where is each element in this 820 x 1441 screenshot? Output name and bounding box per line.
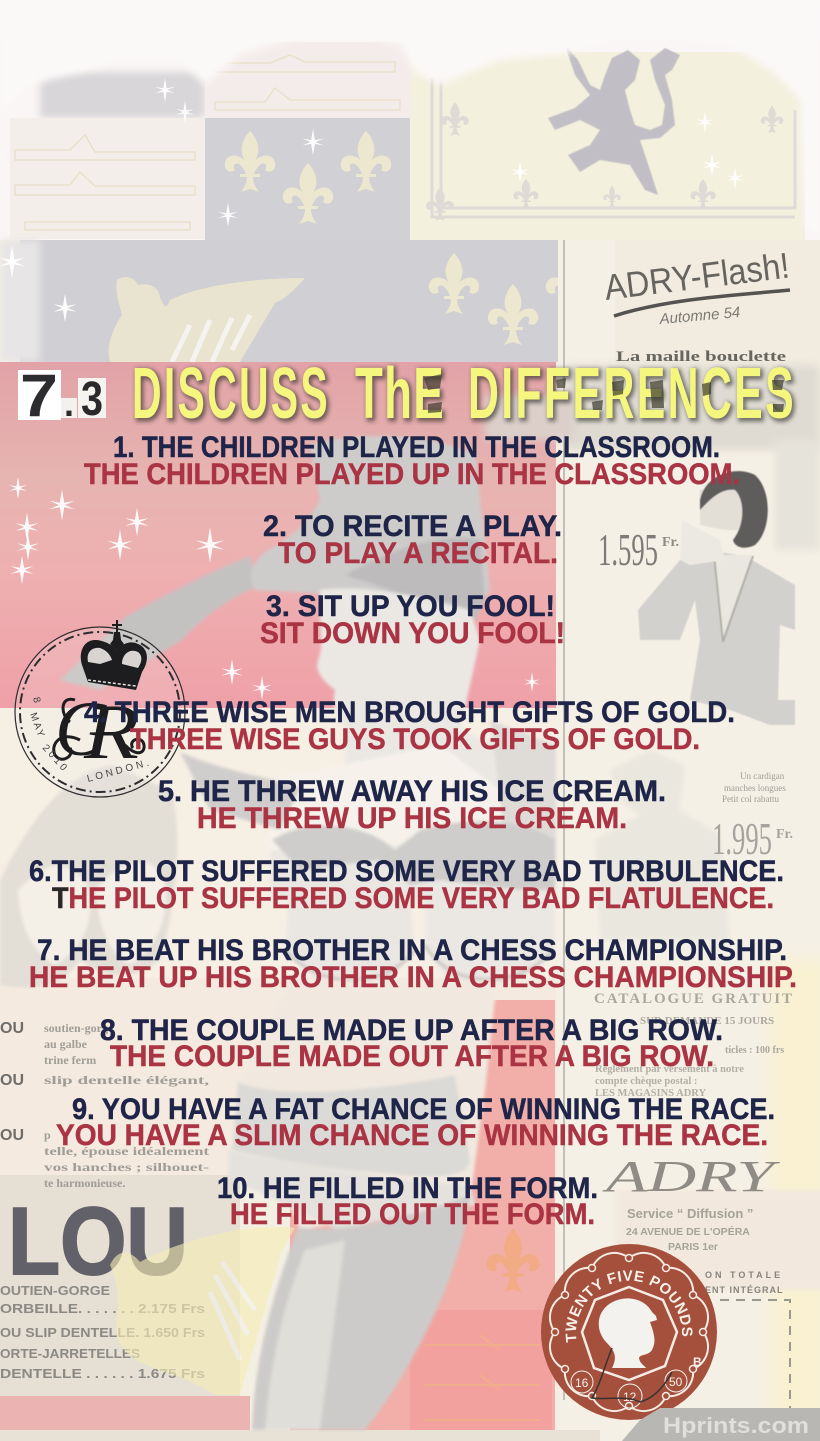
stamp: royal cypher postmark <box>15 620 185 797</box>
text: LOU ad <box>0 1188 205 1381</box>
text: la maille bouclette: La maille bouclette <box>616 349 786 365</box>
text: postmark date: 8 <box>30 696 42 705</box>
icon: orange fleur <box>487 1228 539 1292</box>
text: left column ad: vos hanches ; silhouet- <box>44 1160 209 1174</box>
text: catalogue gratuit: CATALOGUE GRATUIT <box>594 991 792 1007</box>
text: LOU ad: OUTIEN-GORGE <box>0 1283 110 1298</box>
item 5 <box>158 775 666 835</box>
text: left column ad: slip dentelle élégant, <box>44 1073 209 1087</box>
text: stamp values: 12 <box>623 1390 637 1404</box>
text: postmark date: LONDON. <box>86 757 153 785</box>
watermark: Hprints.com <box>663 1413 809 1438</box>
item 1 <box>84 431 740 491</box>
item 10 <box>217 1172 598 1231</box>
text: left column ad: au galbe <box>44 1037 88 1051</box>
starry sparkles <box>0 78 744 700</box>
item 2 <box>263 510 562 570</box>
text: postmark date <box>27 696 153 785</box>
icon: heraldic lion <box>548 45 680 195</box>
photo: pin-up woman <box>0 436 556 1430</box>
text: left column ad: te harmonieuse. <box>44 1176 125 1190</box>
bra cups <box>272 821 555 890</box>
text: stamp legend: TWENTY FIVE POUNDS <box>565 1270 692 1343</box>
torso <box>238 980 497 1230</box>
text: LOU ad: ORBEILLE. . . . . . . 2.175 Frs <box>0 1301 205 1316</box>
text: left column ad <box>0 1020 209 1190</box>
text: stamp values: 50 <box>669 1375 683 1389</box>
title shadow: ThE <box>357 356 447 436</box>
scalloped ring <box>550 1253 708 1411</box>
lions passant faint <box>15 55 400 230</box>
text: order details: SUR DEMANDE 15 JOURS <box>640 1015 774 1027</box>
text: cardigan caption <box>722 771 786 804</box>
text: left column ad: p <box>44 1128 51 1142</box>
item 7 <box>29 934 797 994</box>
badge: 7.3: 7 <box>20 362 58 429</box>
title shadow: DISCUSS <box>134 356 332 436</box>
newsprint right column <box>558 240 820 1441</box>
panel: heraldic flag top <box>0 40 820 362</box>
title <box>18 354 798 436</box>
chest <box>270 745 510 850</box>
list: differences <box>29 431 797 1231</box>
item 4: THREE WISE GUYS TOOK GIFTS OF GOLD. <box>130 723 700 756</box>
lace briefs <box>232 1075 470 1177</box>
text: cardigan caption: Un cardigan <box>740 771 785 781</box>
item 8 <box>100 1014 723 1073</box>
text: ADRY service block <box>601 1152 790 1410</box>
monogram flourishes <box>54 699 144 759</box>
title grunge marks <box>424 374 784 413</box>
icon: yellow harp angel faint <box>110 1227 295 1395</box>
text: left column ad: OU <box>0 1072 24 1089</box>
item 10: HE FILLED OUT THE FORM. <box>230 1198 595 1231</box>
photo: cardigan woman faint <box>595 750 730 940</box>
item 4: 4. THREE WISE MEN BROUGHT GIFTS OF GOLD. <box>84 696 735 729</box>
icon: crown <box>81 620 147 690</box>
item 8: THE COUPLE MADE OUT AFTER A BIG ROW. <box>110 1040 714 1073</box>
text: stamp values <box>571 1370 687 1408</box>
item 10: 10. HE FILLED IN THE FORM. <box>217 1172 598 1205</box>
text: LOU ad: OU SLIP DENTELLE. 1.650 Frs <box>0 1325 205 1340</box>
text: order details: Règlement par versement à notre <box>595 1064 744 1075</box>
icon: profile head <box>599 1298 657 1368</box>
text: LOU ad: DENTELLE . . . . . . 1.675 Frs <box>0 1366 205 1381</box>
text: left column ad: trine ferm <box>44 1053 96 1067</box>
item 5: 5. HE THREW AWAY HIS ICE CREAM. <box>158 775 666 808</box>
text: order details: compte chèque postal : <box>595 1076 697 1087</box>
text: stamp mark B: B <box>693 1355 702 1369</box>
item 7: 7. HE BEAT HIS BROTHER IN A CHESS CHAMPIONSHIP. <box>37 934 787 967</box>
text: ADRY service block: Service “ Diffusion ” <box>627 1206 753 1221</box>
item 3 <box>260 590 565 650</box>
text: ADRY-Flash header <box>602 245 792 328</box>
text: stamp values: 16 <box>575 1376 589 1390</box>
photo: woman in v-neck illustration <box>638 471 795 725</box>
lions pink block <box>425 1335 540 1420</box>
item 9 <box>56 1093 775 1152</box>
item 6 <box>29 855 784 915</box>
item 2: TO PLAY A RECITAL. <box>278 537 558 570</box>
text: postmark date: 2010 <box>40 743 71 775</box>
heading text <box>132 354 798 436</box>
scallop dots <box>552 1254 706 1410</box>
newspaper clippings <box>0 245 795 1420</box>
title letters <box>132 354 796 434</box>
face and neck <box>270 588 556 900</box>
text: left column ad: OU <box>0 1127 24 1144</box>
text: GR monogram: V <box>92 710 102 725</box>
text: postmark date: MAY <box>27 711 47 740</box>
watermark <box>622 1408 820 1441</box>
text: order details: ticles : 100 frs <box>725 1045 784 1056</box>
hair and sleeve <box>251 436 490 620</box>
item 9: YOU HAVE A SLIM CHANCE OF WINNING THE RACE. <box>56 1119 768 1152</box>
text: cardigan caption: manches longues <box>724 783 786 793</box>
item 1: 1. THE CHILDREN PLAYED IN THE CLASSROOM. <box>113 431 720 464</box>
text: GR monogram <box>55 685 139 775</box>
item 4 <box>84 696 735 756</box>
title letters: ThE <box>355 354 445 434</box>
title shadow <box>134 356 798 436</box>
item 3: 3. SIT UP YOU FOOL! <box>266 590 555 623</box>
panel: pink band <box>0 362 600 1441</box>
badge: 7.3: 3 <box>81 373 103 426</box>
text: left column ad: soutien-gorge <box>44 1021 114 1035</box>
forearm <box>60 556 258 690</box>
item 2: 2. TO RECITE A PLAY. <box>263 510 562 543</box>
badge: 7.3: . <box>64 383 74 424</box>
thigh <box>252 1195 470 1430</box>
text: ADRY-Flash header: Automne 54 <box>658 304 741 328</box>
small border fleurs <box>426 102 783 221</box>
icon: harp angel <box>109 277 305 362</box>
text: ADRY service block: ON TOTALE <box>705 1270 783 1280</box>
text: LOU ad: LOU <box>8 1188 188 1295</box>
text: price 1.595: 1.595 <box>598 524 658 575</box>
badge: 7.3 <box>18 362 106 429</box>
text: Fr: Fr. <box>662 535 679 550</box>
text: GR monogram: R <box>83 688 139 775</box>
text: GR monogram: G <box>55 685 110 772</box>
text: ADRY-Flash header: ADRY-Flash! <box>602 245 792 308</box>
fleur-de-lis group <box>225 131 596 345</box>
item 3: SIT DOWN YOU FOOL! <box>260 617 565 650</box>
text: cardigan caption: Petit col rabattu <box>722 794 779 804</box>
text: ADRY service block: ENT INTÉGRAL <box>705 1285 784 1295</box>
text: Fr small: Fr. <box>776 827 793 842</box>
text: order details <box>595 1015 784 1099</box>
shoulder shadow <box>180 752 300 830</box>
item 1: THE CHILDREN PLAYED UP IN THE CLASSROOM. <box>84 458 740 491</box>
text: LOU ad: ORTE-JARRETELLES <box>0 1346 140 1361</box>
text: ADRY service block: 24 AVENUE DE L'OPÉRA <box>626 1225 750 1238</box>
title letters: DISCUSS <box>132 354 330 434</box>
left bra illustration <box>0 765 177 987</box>
text: ADRY service block: PARIS 1er <box>668 1241 718 1253</box>
text: left column ad: telle, épouse idéalement <box>44 1144 209 1158</box>
item 5: HE THREW UP HIS ICE CREAM. <box>197 802 627 835</box>
item 8: 8. THE COUPLE MADE UP AFTER A BIG ROW. <box>100 1014 723 1047</box>
pen cancel scribble <box>592 1348 672 1402</box>
text: order details: LES MAGASINS ADRY <box>595 1088 706 1099</box>
text: left column ad: OU <box>0 1020 24 1037</box>
stamp: twenty five pounds <box>541 1244 717 1420</box>
text: price 1.995: 1.995 <box>712 813 772 864</box>
torn white top edge <box>0 0 820 240</box>
text: ADRY service block: ADRY <box>601 1152 781 1201</box>
